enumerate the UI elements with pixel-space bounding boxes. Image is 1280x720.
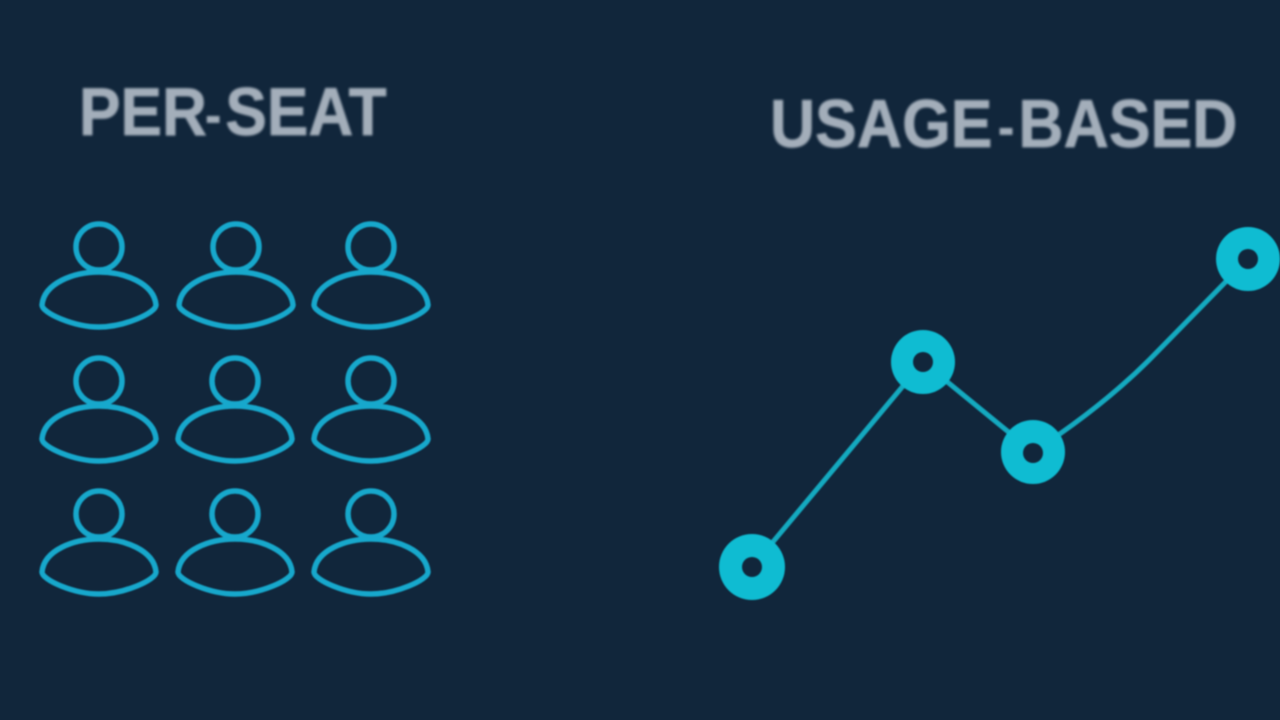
heading: usage-based: USAGE (770, 86, 992, 162)
line chart: usage (719, 227, 1280, 600)
heading: usage-based: - (998, 98, 1014, 156)
heading: per-seat: - (205, 86, 221, 144)
heading: usage-based: BASED (1018, 86, 1237, 162)
heading: per-seat: PER (79, 73, 207, 150)
heading: per-seat: SEAT (225, 73, 387, 150)
icon grid: seats (42, 224, 428, 594)
